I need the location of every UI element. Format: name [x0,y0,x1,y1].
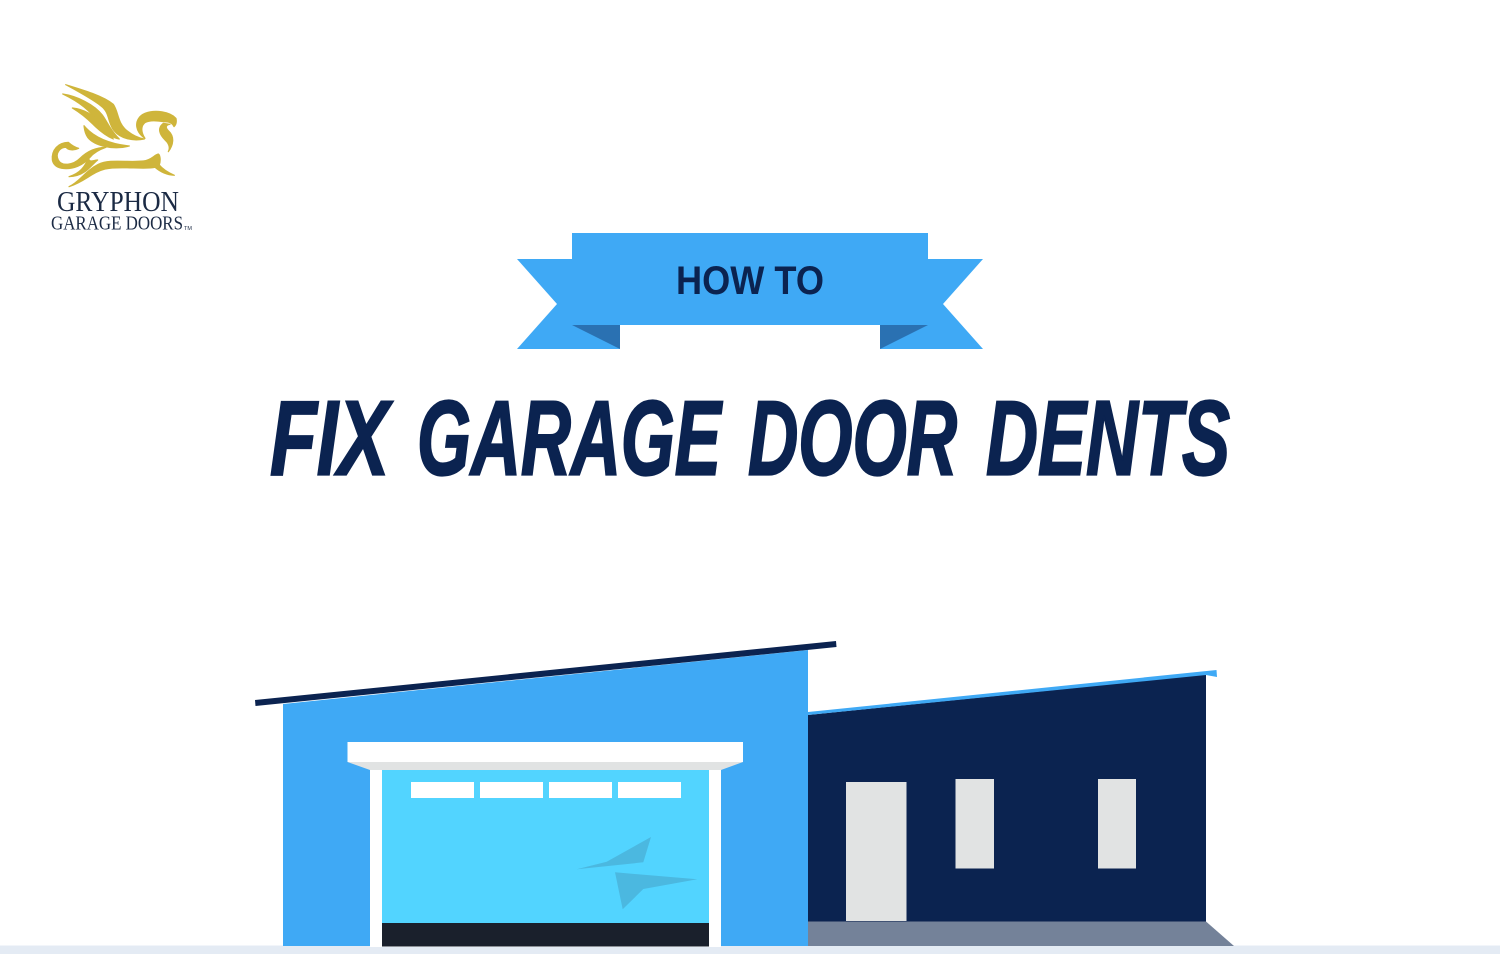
garage wing wall [283,650,808,946]
ribbon centre band [572,233,928,325]
title word DENTS: DENTS [986,380,1230,498]
trademark mark: TM [184,226,192,232]
left window [956,779,994,868]
ribbon banner: HOW TO [517,233,983,349]
title: FIX GARAGE DOOR DENTS [270,380,1230,498]
ribbon left tail [517,259,620,349]
illustration: house with garage [255,641,1234,947]
main wing roof line [808,670,1217,715]
logo: Gryphon Garage Doors [51,85,192,234]
main wing wall [808,674,1206,922]
garage roof line [255,641,836,706]
ribbon text: HOW TO [676,259,824,303]
ground strip [0,946,1500,954]
icon: gold gryphon [52,85,176,187]
door bottom shadow [382,923,709,946]
driveway step [808,922,1234,946]
door panel [382,770,709,924]
ribbon right fold [880,325,928,349]
logo wordmark GARAGE DOORS: GARAGE DOORS [51,214,183,234]
title word GARAGE: GARAGE [417,380,723,498]
door windows [411,782,681,798]
title word DOOR: DOOR [748,380,957,498]
right window [1098,779,1136,868]
door jambs [370,768,721,947]
front door [846,782,906,921]
door header underside [348,762,743,770]
garage door assembly [348,742,743,947]
ribbon left fold [572,325,620,349]
ribbon right tail [880,259,983,349]
logo wordmark GRYPHON: GRYPHON [57,186,179,218]
door header [348,742,743,762]
door dent [577,837,697,909]
title word FIX: FIX [270,380,393,498]
